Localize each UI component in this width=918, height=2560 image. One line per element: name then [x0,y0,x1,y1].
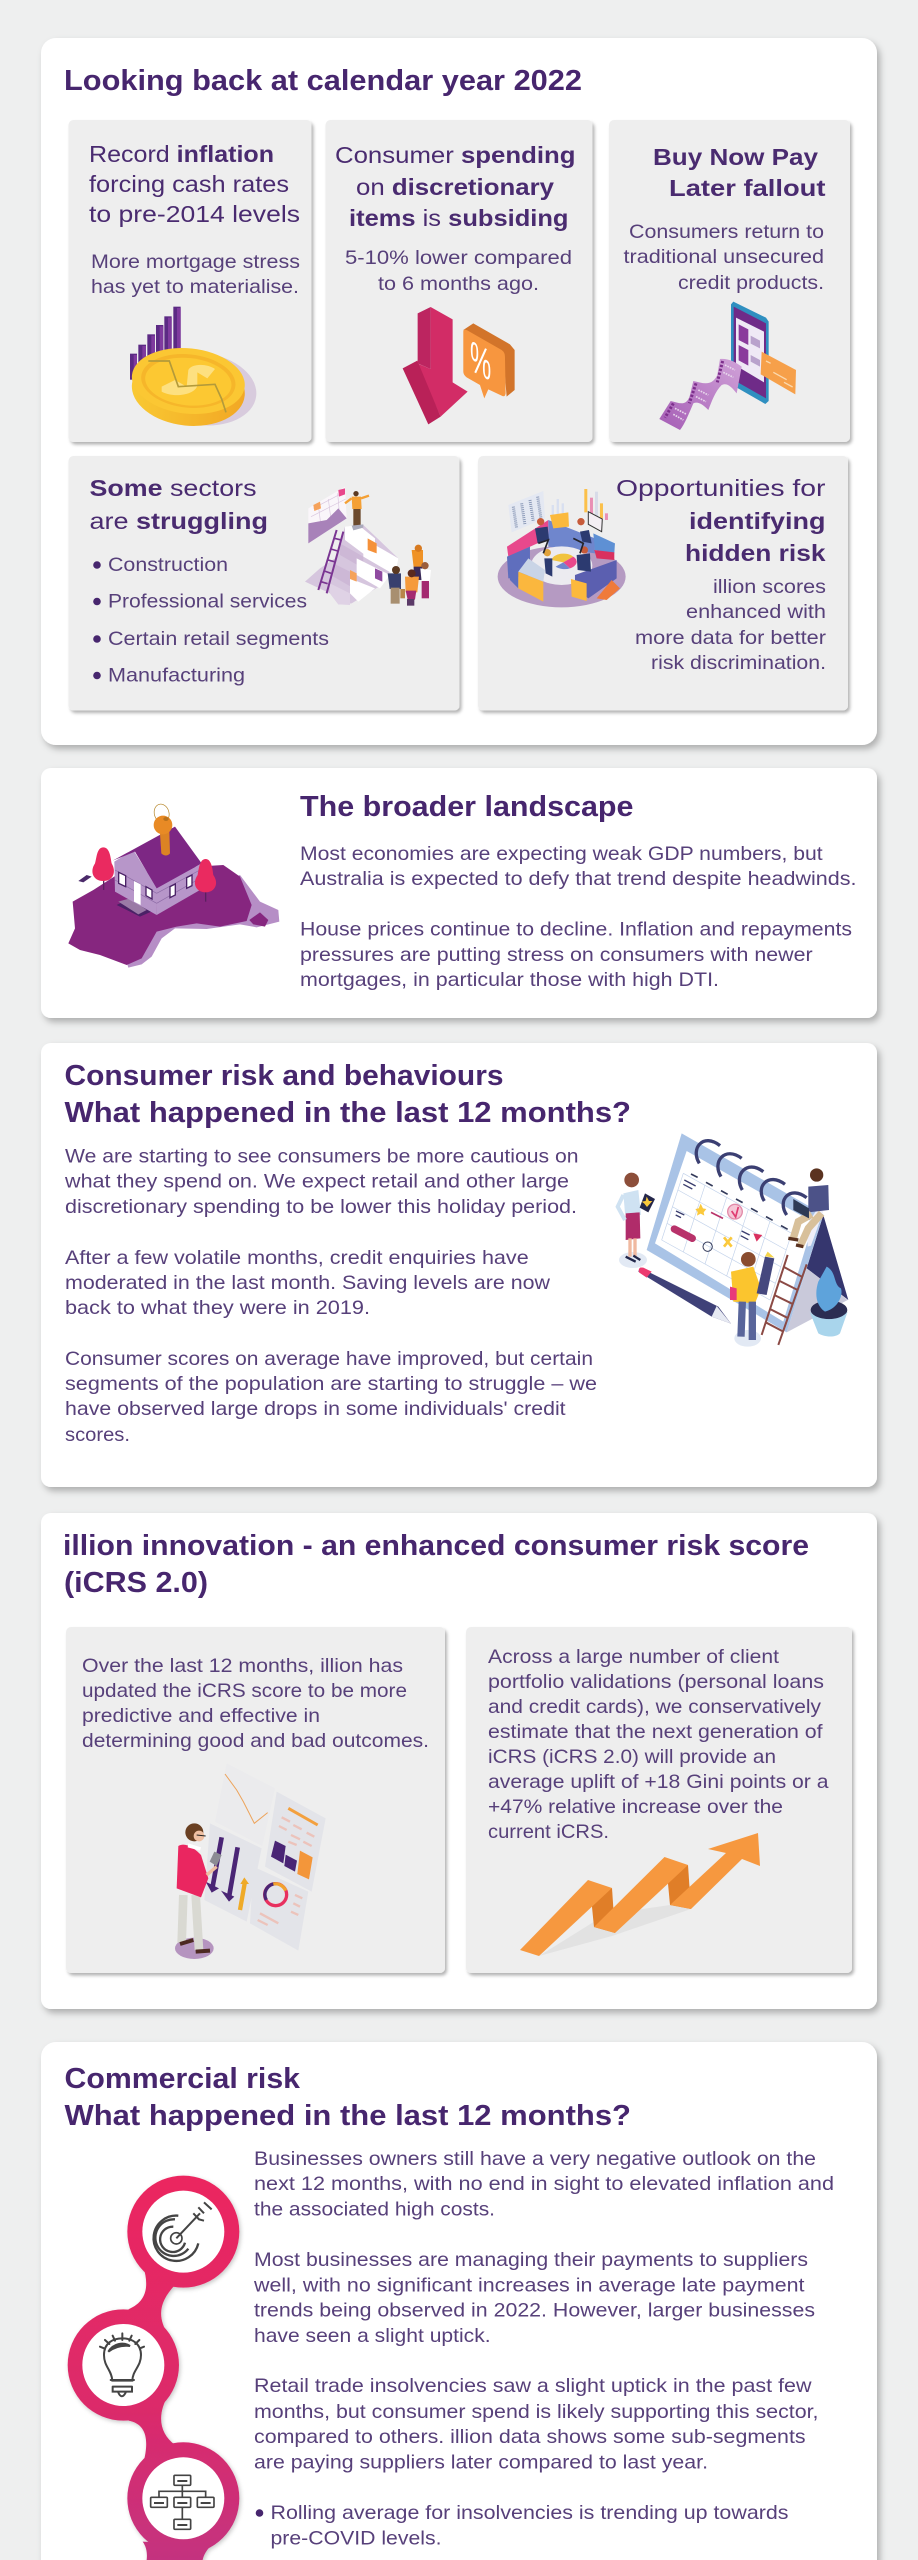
body text: Retail trade insolvencies saw a slight uptick in the past few [254,2375,813,2397]
body text: Rolling average for insolvencies is trending up towards [270,2502,789,2524]
tile heading: forcing cash rates [89,171,289,197]
body text: House prices continue to decline. Inflation and repayments [300,919,852,941]
heading: consumer risk: Consumer risk and behaviours [64,1060,504,1092]
tile text: estimate that the next generation of [488,1721,823,1743]
icon: office ring [498,489,626,607]
body text: Australia is expected to defy that trend despite headwinds. [300,868,856,890]
sector list: Construction [108,554,228,576]
tile: consumer spending [326,120,592,442]
body text: Businesses owners still have a very negative outlook on the [254,2148,816,2170]
tile heading: Consumer spending [335,142,576,168]
body text: are paying suppliers later compared to last year. [254,2452,708,2474]
tile text: enhanced with [686,601,826,623]
tile: iCRS update [66,1627,445,1973]
body text: segments of the population are starting to struggle – we [65,1373,597,1395]
tile text [488,1646,829,1843]
icon: org chart [151,2475,214,2529]
tile: sectors struggling [68,456,460,710]
body text: compared to others. illion data shows some sub-segments [254,2426,806,2448]
icon: phone with receipt and card [659,302,796,430]
body text: months, but consumer spend is likely supporting this sector, [254,2401,818,2423]
icon: cracked coin with rising bars [128,307,261,432]
body text: pressures are putting stress on consumers with newer [300,944,813,966]
tile text: updated the iCRS score to be more [82,1680,407,1702]
man with pencil [730,1252,774,1347]
tile text [624,221,824,294]
icon: target with arrow [154,2202,212,2261]
tile heading: Some sectors [90,475,256,501]
body text: well, with no significant increases in average late payment [253,2275,805,2297]
tile text: credit products. [678,272,824,294]
ladder [762,1255,807,1345]
tile text: Over the last 12 months, illion has [82,1655,403,1677]
body text: mortgages, in particular those with high DTI. [300,969,719,991]
tile heading [616,475,827,566]
body text [300,843,856,991]
heading: looking back: Looking back at calendar year 2022 [64,65,582,97]
panel: commercial risk [41,2042,877,2560]
tile heading: to pre-2014 levels [89,201,300,227]
tile heading: Opportunities for [616,475,826,501]
plant pot [811,1301,847,1319]
chain shape [68,2176,239,2560]
tile text [82,1655,429,1752]
body text: Most economies are expecting weak GDP numbers, but [300,843,823,865]
icon: house on Australia map with key [68,802,279,968]
tile text: and credit cards), we conservatively [488,1696,821,1718]
tile text: determining good and bad outcomes. [82,1730,429,1752]
sector list: Professional services [108,591,307,613]
tile heading: Record inflation [89,141,274,167]
sector list: Certain retail segments [108,628,329,650]
tile text: portfolio validations (personal loans [488,1671,824,1693]
body text: discretionary spending to be lower this holiday period. [65,1196,577,1218]
icon: light bulb [100,2333,144,2396]
body text: We are starting to see consumers be more cautious on [65,1146,578,1168]
body text: pre-COVID levels. [270,2528,442,2550]
tile heading [90,475,268,534]
icon: analyst with dashboards [175,1763,326,1959]
tile heading: Buy Now Pay [653,144,818,170]
tile heading [89,141,300,227]
tile heading: hidden risk [685,540,827,566]
tile text: predictive and effective in [82,1705,320,1727]
heading: commercial risk: What happened in the last 12 months? [64,2100,631,2132]
tile heading [335,142,576,231]
man on calendar with laptop [788,1168,829,1247]
tile heading [653,144,826,201]
heading: illion innovation: illion innovation - an enhanced consumer risk score [63,1530,809,1562]
tile text: Across a large number of client [488,1646,780,1668]
tile: record inflation [68,120,312,442]
tile heading: identifying [689,508,826,534]
tile text: has yet to materialise. [91,276,299,298]
tile text: risk discrimination. [651,652,826,674]
tile text: illion scores [713,576,826,598]
heading: consumer risk [64,1060,631,1129]
tile text: More mortgage stress [91,251,300,273]
icon: down arrow with percent bubble: % [470,330,491,391]
body text: next 12 months, with no end in sight to elevated inflation and [254,2173,834,2195]
tile text [91,251,300,298]
tile text [635,576,827,674]
tile text: average uplift of +18 Gini points or a [488,1771,829,1793]
tile heading: on discretionary [356,174,554,200]
tile heading: are struggling [90,508,268,534]
body text: back to what they were in 2019. [65,1297,370,1319]
body text: what they spend on. We expect retail and other large [64,1171,569,1193]
tile: iCRS 2.0 uplift [466,1627,852,1973]
tile: buy now pay later [609,120,850,442]
body text: scores. [65,1424,130,1446]
heading: consumer risk: What happened in the last 12 months? [64,1097,631,1129]
pencil [638,1268,731,1324]
panel: illion innovation [41,1513,877,2009]
body text: have observed large drops in some individuals' credit [65,1398,566,1420]
body text: Most businesses are managing their payments to suppliers [254,2249,808,2271]
panel: the broader landscape [41,768,877,1018]
tile heading: items is subsiding [349,205,568,231]
icon: stairs, chart and people [305,487,431,606]
icon: rising orange arrow [520,1833,760,1956]
heading: commercial risk: Commercial risk [64,2063,301,2095]
tile text: Consumers return to [629,221,824,243]
body text: trends being observed in 2022. However, larger businesses [254,2300,815,2322]
panel: consumer risk and behaviours [41,1043,877,1487]
body text [253,2148,834,2550]
heading: broader landscape: The broader landscape [300,791,634,823]
tile text: iCRS (iCRS 2.0) will provide an [488,1746,776,1768]
body text: moderated in the last month. Saving levels are now [65,1272,551,1294]
tile text: more data for better [635,627,827,649]
graphic: chain of icon circles [68,2176,239,2560]
woman with clipboard [618,1173,655,1268]
tile text: +47% relative increase over the [488,1796,783,1818]
body text [64,1146,597,1446]
tile heading: Later fallout [669,175,826,201]
icon: down arrow with percent bubble [403,307,515,424]
body text: Consumer scores on average have improved, but certain [65,1348,593,1370]
tile: hidden risk [478,456,848,710]
body text: After a few volatile months, credit enquiries have [65,1247,529,1269]
tile text: current iCRS. [488,1821,609,1843]
heading: commercial risk [64,2063,631,2132]
panel: looking back at 2022 [41,38,877,745]
tile text: to 6 months ago. [378,273,539,295]
heading: illion innovation: (iCRS 2.0) [64,1567,208,1599]
body text: have seen a slight uptick. [254,2325,491,2347]
icon: calendar with people [618,1133,848,1347]
sector list: Manufacturing [108,664,245,686]
sector list [93,554,329,686]
tile text [345,247,572,295]
tile text: traditional unsecured [624,246,824,268]
body text: the associated high costs. [254,2199,495,2221]
heading: illion innovation [63,1530,809,1599]
tile text: 5-10% lower compared [345,247,572,269]
